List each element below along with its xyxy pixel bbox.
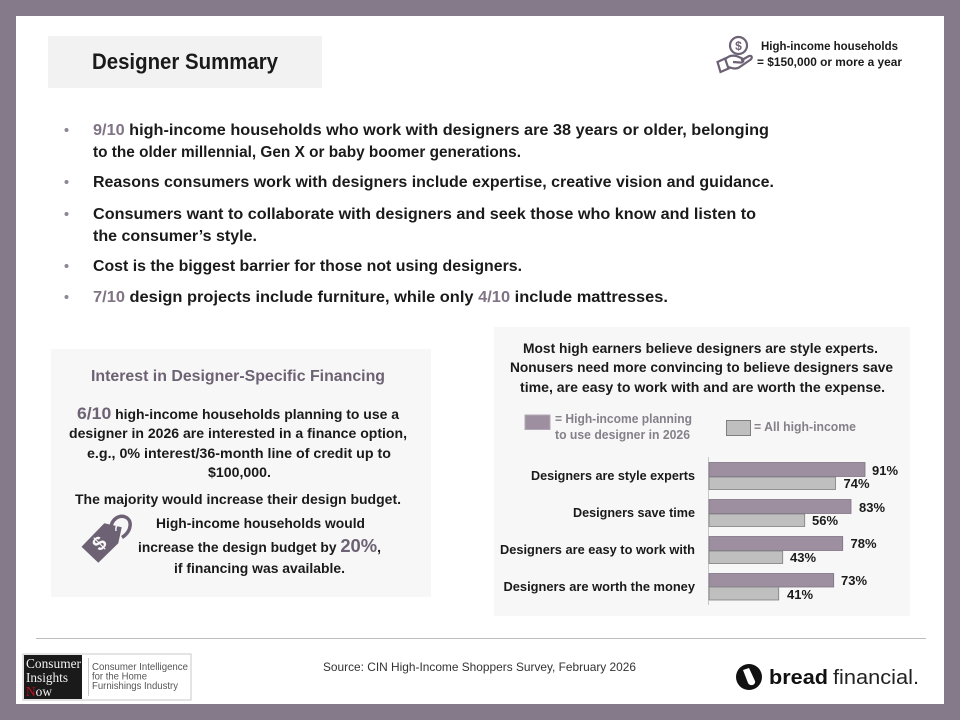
bullet list: key findings: Reasons consumers work with designers include expertise, creative vision and guidance. xyxy=(93,174,774,191)
title xyxy=(48,36,322,88)
row: worth the money: Designers are worth the money xyxy=(504,579,696,594)
logo: Consumer Insights Now: Consumer Intelligence xyxy=(92,661,188,673)
row: save time: Designers save time xyxy=(573,505,695,520)
row: easy to work with: 78% xyxy=(850,536,877,551)
row: easy to work with: 43% xyxy=(790,550,816,565)
bullet list: key findings: 7/10 design projects include furniture, while only 4/10 include mattresses. xyxy=(93,289,668,306)
logo: Consumer Insights Now xyxy=(23,654,191,700)
note: high-income definition: High-income households xyxy=(761,39,898,53)
panel heading xyxy=(510,341,893,395)
row: save time: 83% xyxy=(859,500,885,515)
row: style experts xyxy=(531,462,898,491)
text block: finance option: designer in 2026 are interested in a finance option, xyxy=(69,426,407,441)
bullet list: key findings xyxy=(64,122,774,306)
legend: to use designer in 2026 xyxy=(555,428,690,442)
legend xyxy=(525,412,856,442)
panel: financing interest xyxy=(51,349,431,597)
legend: = High-income planning xyxy=(555,412,692,426)
logo: Consumer Insights Now: Now xyxy=(26,685,53,700)
logo: Consumer Insights Now: Furnishings Industry xyxy=(92,680,179,692)
logo: Consumer Insights Now: for the Home xyxy=(92,670,147,682)
row: worth the money: 41% xyxy=(787,587,813,602)
row: save time xyxy=(573,500,885,528)
panel heading: Nonusers need more convincing to believe designers save xyxy=(510,360,893,375)
title: Designer Summary xyxy=(92,49,279,74)
row: style experts: Designers are style experts xyxy=(531,468,695,483)
icon: hand holding coin: $ xyxy=(735,39,742,53)
bullet list: key findings: the consumer’s style. xyxy=(93,228,257,245)
icon: hand holding coin xyxy=(718,37,752,72)
note: high-income definition: = $150,000 or more a year xyxy=(757,55,902,69)
bullet list: key findings: Cost is the biggest barrier for those not using designers. xyxy=(93,258,522,275)
bar chart xyxy=(500,457,898,605)
bullet list: key findings: to the older millennial, Gen X or baby boomer generations. xyxy=(93,144,521,161)
source note: Source: CIN High-Income Shoppers Survey, February 2026 xyxy=(323,660,636,674)
text block: budget increase: The majority would increase their design budget. xyxy=(75,492,401,507)
icon: price tag: $ xyxy=(88,532,112,556)
row: worth the money xyxy=(504,573,867,602)
row: style experts: 91% xyxy=(872,463,898,478)
row: save time: 56% xyxy=(812,513,838,528)
text block: finance option: e.g., 0% interest/36-month line of credit up to xyxy=(87,446,391,461)
text block: finance option xyxy=(69,404,407,480)
row: easy to work with: Designers are easy to work with xyxy=(500,542,695,557)
row: style experts: 74% xyxy=(844,476,870,491)
row: easy to work with xyxy=(500,536,877,565)
text block: budget increase: if financing was available. xyxy=(174,561,345,576)
legend: = All high-income xyxy=(754,420,856,434)
text block: budget increase: increase the design budget by 20%, xyxy=(138,536,381,556)
logo: Consumer Insights Now: Consumer xyxy=(26,657,81,672)
row: worth the money: 73% xyxy=(841,573,867,588)
note: high-income definition xyxy=(757,39,902,69)
bullet list: key findings: 9/10 high-income households who work with designers are 38 years or older, belonging xyxy=(93,122,769,139)
text block: budget increase xyxy=(75,492,401,576)
icon: price tag xyxy=(82,516,130,563)
panel heading: time, are easy to work with and are worth the expense. xyxy=(520,380,885,395)
panel heading: Most high earners believe designers are style experts. xyxy=(523,341,878,356)
logo: bread financial xyxy=(736,664,919,690)
text block: finance option: $100,000. xyxy=(208,465,271,480)
text block: finance option: 6/10 high-income households planning to use a xyxy=(77,404,400,423)
text block: budget increase: High-income households would xyxy=(156,516,365,531)
logo: bread financial: financial. xyxy=(833,667,919,689)
logo: Consumer Insights Now: Insights xyxy=(26,671,68,686)
panel heading: Interest in Designer-Specific Financing xyxy=(91,368,385,385)
panel: designer perceptions chart xyxy=(494,327,910,616)
bullet list: key findings: Consumers want to collaborate with designers and seek those who know and listen to xyxy=(93,206,756,223)
logo: bread financial: bread xyxy=(769,667,828,689)
